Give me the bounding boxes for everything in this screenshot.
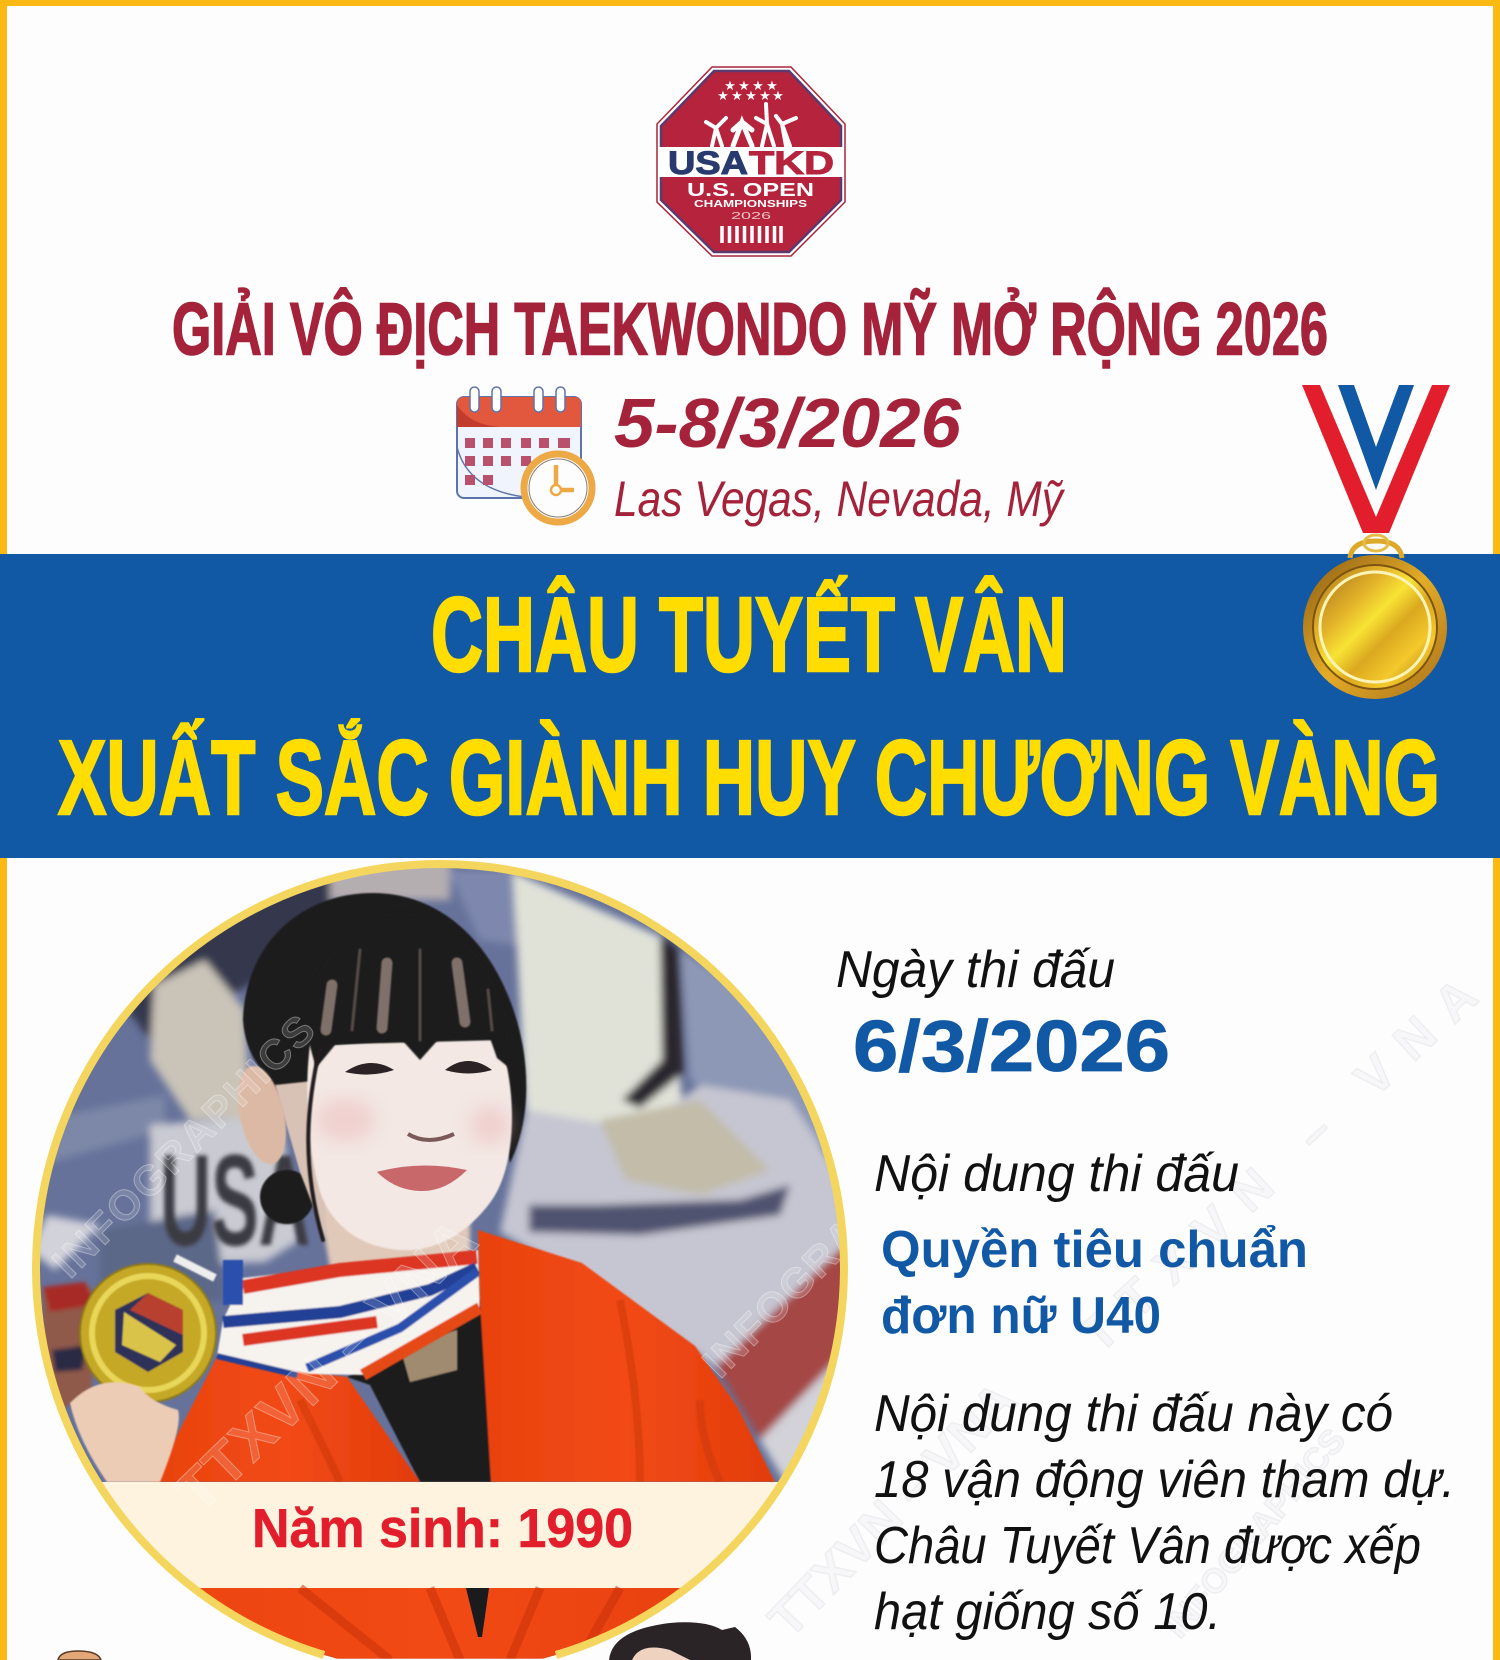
- tournament logo: ★: [731, 88, 743, 103]
- tournament logo: ★: [745, 88, 757, 103]
- tournament logo: [657, 67, 845, 256]
- photo backdrop: [30, 860, 850, 1482]
- headline line 1: CHÂU TUYẾT VÂN: [431, 575, 1067, 694]
- event location: Las Vegas, Nevada, Mỹ: [614, 471, 1066, 527]
- hair highlights: [308, 950, 492, 1240]
- tournament logo: ★: [759, 88, 771, 103]
- second medal: [43, 1282, 100, 1408]
- tournament logo: ★: [766, 78, 778, 93]
- orange flag: [153, 1230, 775, 1482]
- tournament logo: TKD: [749, 145, 834, 181]
- gold medal held up: [80, 1264, 216, 1402]
- nose: [408, 1134, 454, 1140]
- event category: Quyền tiêu chuẩn: [881, 1221, 1308, 1279]
- tournament logo: USA: [668, 145, 748, 181]
- birth year text: Năm sinh: 1990: [252, 1497, 633, 1559]
- bun: [260, 1170, 314, 1224]
- medal ribbon: [175, 1250, 480, 1375]
- event category: [881, 1221, 1308, 1345]
- cartoon athlete head: [609, 1622, 751, 1660]
- tournament logo: ★: [772, 88, 784, 103]
- flag below band: [200, 1584, 680, 1659]
- watermarks on white area: TTXVN – VNA: [758, 1371, 1027, 1648]
- competition date label: Ngày thi đấu: [836, 941, 1115, 999]
- backdrop letters USA: USA: [160, 1127, 310, 1273]
- face: [307, 1040, 512, 1250]
- icon: calendar and clock: [457, 387, 592, 522]
- watermarks on photo: TTXVN – VNA: [164, 1207, 490, 1524]
- tournament logo: 2026: [731, 211, 772, 222]
- tournament logo: U.S. OPEN: [687, 180, 814, 200]
- icon: gold medal: [1302, 385, 1450, 699]
- ear: [238, 1065, 287, 1165]
- neck: [318, 1200, 470, 1268]
- description paragraph: 18 vận động viên tham dự.: [874, 1451, 1455, 1509]
- hair back: [243, 893, 526, 1163]
- description paragraph: Nội dung thi đấu này có: [874, 1385, 1393, 1443]
- cartoon fist: [58, 1651, 101, 1660]
- tournament logo: ★: [724, 78, 736, 93]
- portrait photo in circle: [32, 860, 848, 1659]
- eyes: [345, 1061, 492, 1075]
- tournament logo: ★: [752, 78, 764, 93]
- description paragraph: [874, 1385, 1455, 1641]
- mouth: [377, 1165, 467, 1191]
- watermarks on white area: [758, 967, 1488, 1648]
- watermarks on photo: INFOGRAPHICS: [43, 1006, 324, 1286]
- event category label: Nội dung thi đấu: [874, 1145, 1239, 1203]
- fringe: [309, 1039, 508, 1068]
- blue headline band: [0, 554, 1500, 858]
- birth year band: [102, 1482, 778, 1588]
- watermarks on photo: INFOGRAPHICS: [693, 1113, 967, 1386]
- tournament logo: ★: [738, 78, 750, 93]
- watermarks on photo: [43, 1006, 967, 1524]
- watermarks on white area: TTXVN – VNA: [1069, 967, 1488, 1363]
- competition date: 6/3/2026: [853, 1007, 1170, 1087]
- skin beside face: [275, 1080, 326, 1240]
- cheeks: [315, 1098, 510, 1145]
- tournament logo: ★: [717, 88, 729, 103]
- tournament logo: CHAMPIONSHIPS: [694, 199, 807, 210]
- hand: [70, 1382, 179, 1482]
- event date: 5-8/3/2026: [614, 384, 962, 462]
- description paragraph: Châu Tuyết Vân được xếp: [874, 1517, 1421, 1575]
- event category: đơn nữ U40: [881, 1287, 1161, 1345]
- watermarks on white area: INFOGRAPHICS: [1157, 1422, 1353, 1645]
- description paragraph: hạt giống số 10.: [874, 1583, 1221, 1641]
